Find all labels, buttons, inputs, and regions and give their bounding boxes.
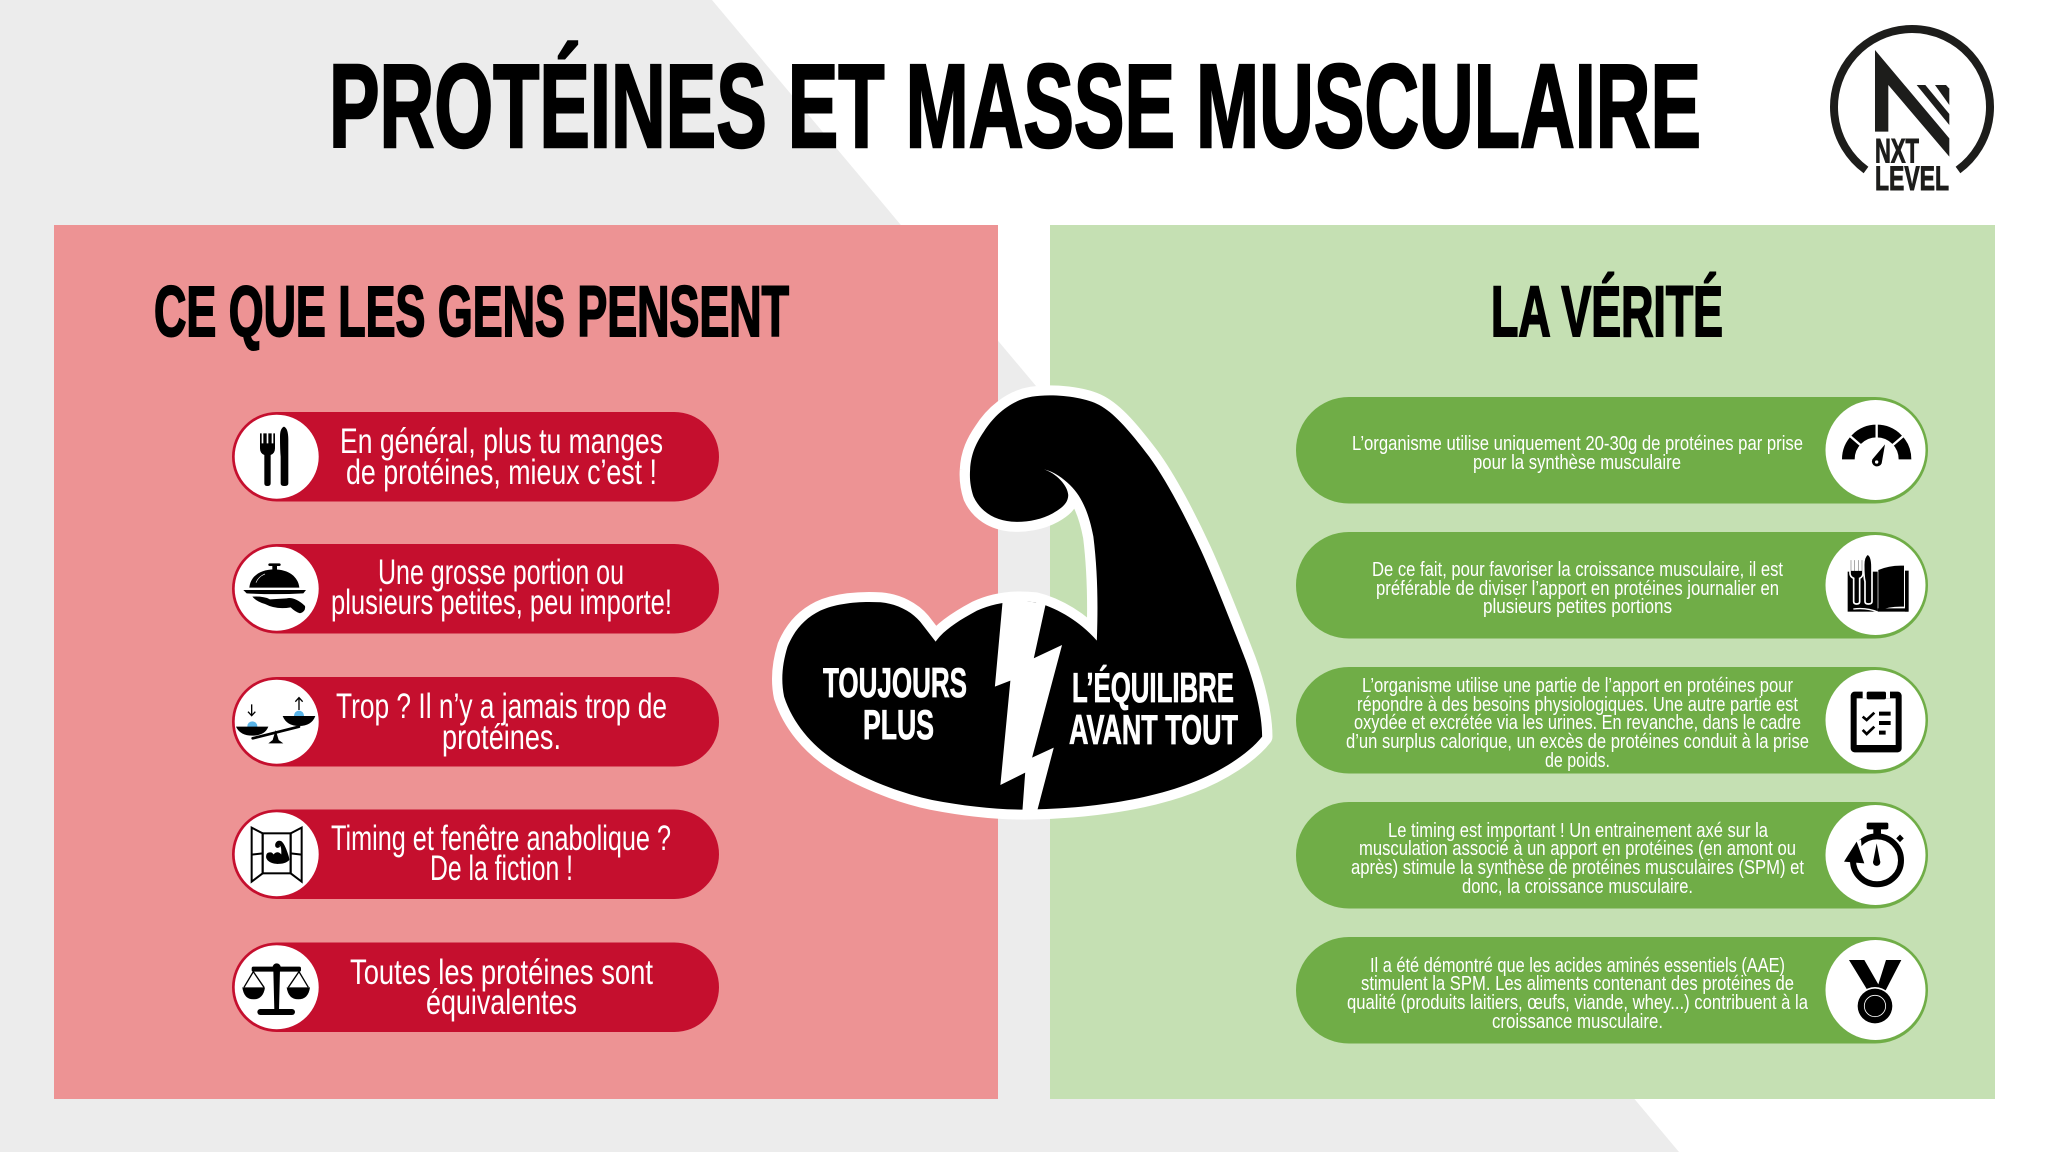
label: toujours plus: PLUS <box>863 701 934 748</box>
text: myth 5 <box>350 953 653 1022</box>
text: truth 5: stimulent la SPM. Les aliments contenant des protéines de <box>1361 973 1794 995</box>
text: myth 1: de protéines, mieux c’est ! <box>346 453 657 492</box>
text: truth 4 <box>1351 820 1804 898</box>
myth 2 <box>232 544 719 634</box>
text: truth 4: après) stimule la synthèse de protéines musculaires (SPM) et <box>1351 857 1804 879</box>
text: truth 2 <box>1372 559 1783 618</box>
text: truth 3: d’un surplus calorique, un excès de protéines conduit à la prise <box>1346 731 1809 753</box>
myth 1 <box>232 412 719 502</box>
central flexed muscle <box>782 395 1262 811</box>
truth 5 <box>1296 937 1928 1044</box>
text: truth 3: oxydée et excrétée via les urines. En revanche, dans le cadre <box>1354 712 1801 734</box>
text: myth 1 <box>340 422 663 492</box>
text: truth 4: musculation associé à un apport en protéines (en amont ou <box>1359 838 1796 860</box>
text: myth 2 <box>331 553 672 622</box>
text: myth 2: plusieurs petites, peu importe! <box>331 583 672 622</box>
truth 4 <box>1296 802 1928 908</box>
text: myth 4 <box>331 819 671 888</box>
logo: NXT Level: NXT <box>1875 133 1919 171</box>
myth 5 <box>232 942 719 1032</box>
icon: window with muscle <box>252 828 302 882</box>
heading: la vérité: LA VÉRITÉ <box>1491 273 1723 352</box>
text: truth 5: croissance musculaire. <box>1492 1011 1663 1033</box>
truth 1 <box>1296 397 1928 504</box>
text: truth 1 <box>1352 433 1803 474</box>
myth 4 <box>232 810 719 899</box>
icon: fork and knife <box>260 427 288 486</box>
text: truth 5 <box>1347 955 1809 1033</box>
text: myth 3: Trop ? Il n’y a jamais trop de <box>336 687 667 726</box>
truth 3 <box>1296 667 1928 774</box>
lightning bolt <box>995 599 1062 811</box>
label: l'équilibre avant tout <box>1069 664 1238 753</box>
text: truth 1: pour la synthèse musculaire <box>1473 452 1681 474</box>
text: myth 4: Timing et fenêtre anabolique ? <box>331 819 671 858</box>
icon: balance with arrows <box>236 698 315 743</box>
icon: serving cloche <box>243 563 306 613</box>
heading: ce que les gens pensent: CE QUE LES GENS PENSENT <box>154 273 789 352</box>
text: truth 3 <box>1346 675 1809 772</box>
text: truth 3: répondre à des besoins physiologiques. Une autre partie est <box>1357 694 1798 716</box>
logo: NXT Level: LEVEL <box>1875 160 1949 198</box>
text: truth 3: L’organisme utilise une partie de l’apport en protéines pour <box>1362 675 1793 697</box>
icon: stopwatch <box>1844 823 1904 884</box>
icon: medal <box>1849 960 1901 1025</box>
text: truth 2: préférable de diviser l’apport en protéines journalier en <box>1376 578 1779 600</box>
icon: clipboard checklist <box>1851 690 1902 752</box>
label: toujours plus: TOUJOURS <box>823 659 967 706</box>
text: myth 4: De la fiction ! <box>430 849 573 888</box>
icon: book and cutlery <box>1848 554 1909 612</box>
text: truth 1: L’organisme utilise uniquement 20-30g de protéines par prise <box>1352 433 1803 455</box>
panel: la vérité <box>1050 225 1995 1099</box>
text: truth 4: donc, la croissance musculaire. <box>1462 876 1693 898</box>
myth 3 <box>232 677 719 766</box>
text: myth 2: Une grosse portion ou <box>378 553 624 592</box>
text: truth 4: Le timing est important ! Un entrainement axé sur la <box>1388 820 1769 842</box>
text: myth 3: protéines. <box>442 718 561 757</box>
label: toujours plus <box>823 659 967 748</box>
text: truth 5: Il a été démontré que les acides aminés essentiels (AAE) <box>1370 955 1785 977</box>
panel: ce que les gens pensent <box>54 225 998 1099</box>
icon: gauge <box>1848 423 1905 466</box>
text: myth 5: équivalentes <box>426 983 577 1022</box>
text: truth 2: De ce fait, pour favoriser la croissance musculaire, il est <box>1372 559 1783 581</box>
text: myth 1: En général, plus tu manges <box>340 422 663 461</box>
text: truth 5: qualité (produits laitiers, œufs, viande, whey...) contribuent à la <box>1347 992 1809 1014</box>
text: myth 3 <box>336 687 667 757</box>
icon: scales <box>242 963 310 1015</box>
logo: NXT Level <box>1834 29 1990 198</box>
truth 2 <box>1296 532 1928 638</box>
text: myth 5: Toutes les protéines sont <box>350 953 653 992</box>
label: l'équilibre avant tout: AVANT TOUT <box>1069 706 1238 753</box>
label: l'équilibre avant tout: L’ÉQUILIBRE <box>1072 664 1234 711</box>
text: truth 3: de poids. <box>1545 750 1610 772</box>
text: truth 2: plusieurs petites portions <box>1483 596 1672 618</box>
